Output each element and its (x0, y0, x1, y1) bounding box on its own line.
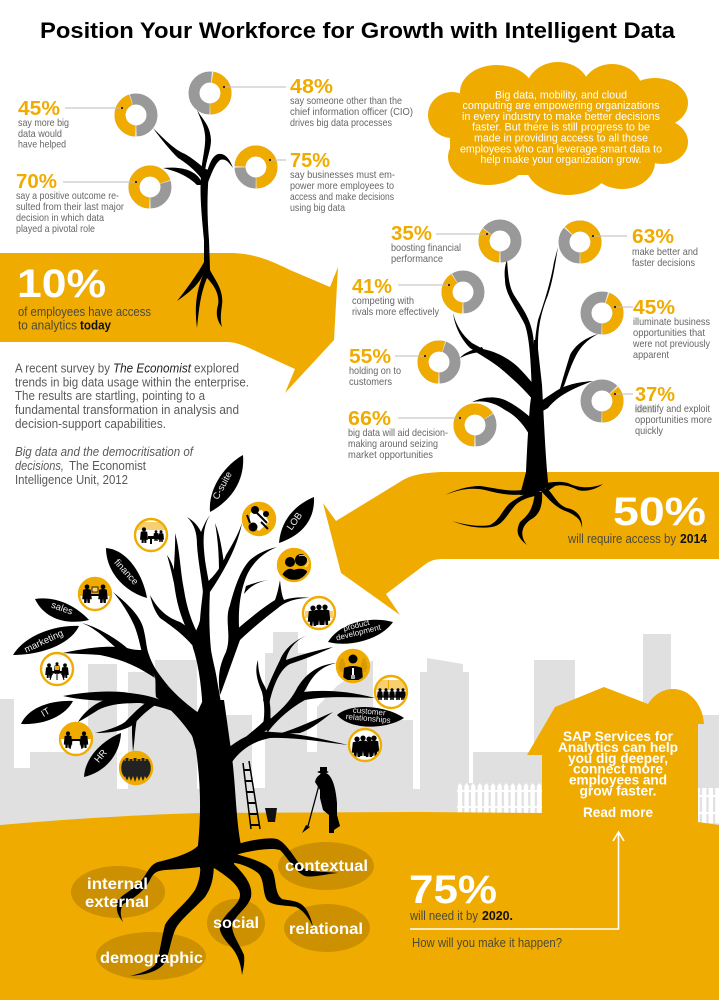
stat: 45% say more big data (18, 98, 123, 150)
10% callout: today (80, 318, 112, 332)
icon: three executives (303, 597, 335, 629)
stat: 41% competing with rivals: competing with (352, 296, 414, 307)
stat: 70% positive outcome: sulted from their last major (16, 202, 124, 213)
leaf: IT: IT (39, 706, 52, 720)
stat: 63% better decisions: make better and (632, 247, 698, 258)
root labels: demographic (100, 950, 203, 967)
stat: 41% competing with rivals (352, 276, 450, 318)
10% callout: 10% (17, 262, 106, 306)
stat: 75% empower more employees: using big data (290, 203, 345, 214)
medium tree (445, 247, 603, 545)
ground (0, 812, 719, 1000)
stat: 75% empower more employees: power more employees to (290, 181, 394, 192)
barn text: connect more (573, 760, 663, 776)
donut 45% opportunities (582, 293, 622, 333)
leaf: C-suite (210, 455, 243, 512)
cloud text: made in providing access to all those (474, 132, 648, 144)
stat: 37% identify and exploit: opportunities more (635, 415, 712, 426)
survey paragraph: explored (194, 362, 239, 376)
stat: 66% decision-making: making around seizing (348, 439, 438, 450)
stat: 45% illuminate opportunities: 45% (633, 297, 675, 319)
stat: 48% someone other than CIO (223, 76, 413, 129)
icon: call centre (278, 549, 310, 581)
skyline (0, 632, 719, 830)
barn text (558, 728, 678, 798)
icon: presenter at table (135, 519, 167, 551)
citation: Big data and the democritisation of (15, 445, 194, 459)
cloud text: help make your organization grow. (480, 154, 642, 166)
stat: 55% holding on to customers: 55% (349, 346, 391, 368)
root labels: social (213, 915, 259, 932)
leaf: LOB (279, 497, 314, 543)
75% callout: 75% (409, 868, 497, 912)
leaf: customer relationships: customer (352, 706, 386, 717)
title: Position Your Workforce for Growth with Intelligent Data (40, 18, 675, 43)
survey paragraph: The results are startling, pointing to a (15, 389, 205, 403)
survey paragraph: fundamental transformation in analysis and (15, 403, 239, 417)
leaf: C-suite: C-suite (211, 470, 235, 502)
cloud text: Big data, mobility, and cloud (495, 90, 627, 102)
10% callout (17, 262, 151, 332)
50% callout: 50% (613, 490, 706, 534)
icon: team from above (243, 503, 275, 535)
stat: 66% decision-making: 66% (348, 408, 391, 430)
stat: 45% say more big data: data would (18, 129, 62, 140)
survey paragraph (15, 362, 249, 431)
leaf: HR (84, 733, 121, 777)
small tree (153, 110, 233, 328)
cloud text: faster. But there is still progress to be (472, 122, 650, 134)
arrow: to read more (410, 832, 624, 929)
donut 75% (240, 151, 272, 183)
stat: 45% say more big data: say more big (18, 118, 69, 129)
stat: 48% someone other than CIO: say someone other than the (290, 96, 402, 107)
stat: 41% competing with rivals: rivals more effectively (352, 307, 440, 318)
stat: 70% positive outcome (16, 171, 137, 235)
closing question: How will you make it happen? (412, 935, 562, 950)
stat: 75% empower more employees: say businesses must em- (290, 170, 395, 181)
stat: 63% better decisions (592, 226, 698, 269)
icon: suited manager (337, 650, 369, 682)
citation: The Economist (69, 459, 146, 473)
cloud text: in every industry to make better decisions (462, 111, 660, 123)
stat: 55% holding on to customers: customers (349, 377, 392, 388)
icon: two at table (60, 723, 92, 755)
stat: 45% illuminate opportunities: illuminate business (633, 317, 710, 328)
stat: 63% better decisions: faster decisions (632, 258, 695, 269)
barn text: grow faster. (580, 782, 656, 798)
icon: standing team (349, 729, 381, 761)
stat: 45% illuminate opportunities: apparent (633, 350, 669, 361)
stat: 48% someone other than CIO: chief information officer (CIO) (290, 107, 413, 118)
barn (527, 687, 704, 824)
donut 63% (557, 219, 603, 265)
donut 41% (447, 276, 479, 308)
citation (15, 445, 194, 487)
root labels: relational (289, 921, 363, 938)
stat: 55% holding on to customers (349, 346, 426, 388)
stat: 37% identify and exploit: 37% (635, 384, 675, 406)
barn text: you dig deeper, (568, 750, 668, 766)
75% callout: will need it by (409, 908, 478, 923)
leaf: marketing (13, 626, 79, 656)
leaf: HR: HR (92, 748, 110, 765)
arrow: 10% band (0, 253, 338, 393)
donut 66% (459, 409, 491, 441)
75% callout (409, 868, 513, 923)
stat: 35% boosting financial performance: boosting financial (391, 243, 461, 254)
stat: 55% holding on to customers: holding on to (349, 366, 401, 377)
10% callout: of employees have access (18, 304, 151, 319)
stat: 45% illuminate opportunities (614, 297, 711, 361)
stat: 75% empower more employees: 75% (290, 150, 330, 172)
donut 35% (484, 225, 516, 257)
icon: crowd (120, 752, 152, 784)
stat: 66% decision-making: market opportunities (348, 450, 433, 461)
survey paragraph: The Economist (113, 362, 191, 376)
icon: meeting table (41, 653, 73, 685)
cloud text (460, 90, 662, 166)
survey paragraph: trends in big data usage within the enterprise. (15, 376, 249, 390)
50% callout: 2014 (680, 531, 708, 546)
bucket (265, 808, 277, 822)
cloud (428, 62, 688, 195)
stat: 45% illuminate opportunities: opportunities that (633, 328, 705, 339)
survey paragraph: decision-support capabilities. (15, 417, 166, 431)
stat: 35% boosting financial performance (391, 223, 488, 265)
leaf: finance (106, 548, 147, 598)
leaf: product development (328, 618, 393, 644)
leaf: LOB: LOB (285, 511, 305, 533)
stat: 75% empower more employees (269, 150, 395, 214)
survey paragraph: A recent survey by (15, 362, 111, 376)
stat: 41% competing with rivals: 41% (352, 276, 392, 298)
50% callout (567, 490, 708, 546)
icon: group row (375, 676, 407, 708)
stat: 70% positive outcome: decision in which data (16, 213, 104, 224)
stat: 48% someone other than CIO: 48% (290, 76, 333, 98)
donut 48% (192, 75, 228, 111)
stat: 37% identify and exploit: identify and exploit (635, 404, 710, 415)
donut 70% (134, 171, 166, 203)
stat: 63% better decisions: 63% (632, 226, 674, 248)
gardener (302, 767, 340, 833)
root labels (85, 858, 368, 967)
leaf: finance: finance (112, 557, 140, 587)
icon: two at desk (79, 578, 111, 612)
cloud text: computing are empowering organizations (462, 100, 660, 112)
ladder (243, 761, 260, 829)
leaf: marketing: marketing (23, 628, 65, 656)
10% callout: to analytics (18, 318, 77, 332)
barn text: SAP Services for (563, 728, 674, 744)
donut 55% (423, 346, 455, 378)
50% callout: will require access by (567, 531, 676, 546)
barn text: employees and (569, 772, 667, 788)
donut 45% more big data (120, 99, 152, 131)
stat: 37% identify and exploit (614, 384, 712, 437)
leaf: product development: development (335, 622, 382, 642)
root ellipses (71, 842, 374, 980)
read more link: Read more (583, 804, 653, 820)
stat: 75% empower more employees: access and make decisions (290, 192, 394, 203)
leaf: sales (35, 598, 89, 622)
leaf: product development: product (342, 618, 371, 633)
cloud text: employees who can leverage smart data to (460, 144, 662, 156)
stat: 37% identify and exploit: quickly (635, 426, 664, 437)
stat: 45% say more big data: have helped (18, 140, 66, 150)
stat: 66% decision-making (348, 408, 461, 461)
root labels: internal (87, 876, 148, 893)
barn text: Analytics can help (558, 739, 678, 755)
large tree (63, 515, 375, 976)
stat: 70% positive outcome: played a pivotal role (16, 224, 95, 235)
fence left (457, 783, 542, 814)
75% callout: 2020. (482, 908, 513, 923)
stat: 70% positive outcome: say a positive outcome re- (16, 191, 119, 202)
stat: 66% decision-making: big data will aid decision- (348, 428, 448, 439)
citation: Intelligence Unit, 2012 (15, 473, 128, 487)
leaf: IT (21, 701, 73, 724)
trunk (190, 700, 241, 869)
leaf: customer relationships: relationships (345, 712, 391, 725)
citation: decisions, (15, 459, 64, 473)
root labels: contextual (285, 858, 368, 875)
arrow: 50% band (323, 472, 719, 615)
stat: 35% boosting financial performance: performance (391, 254, 443, 265)
leaf: customer relationships (337, 706, 404, 727)
fence right (698, 788, 719, 824)
leaf: sales: sales (50, 600, 74, 618)
stat: 48% someone other than CIO: drives big data processes (290, 118, 392, 129)
root labels: external (85, 894, 149, 911)
donut 37% (579, 378, 625, 424)
stat: 35% boosting financial performance: 35% (391, 223, 432, 245)
stat: 70% positive outcome: 70% (16, 171, 57, 193)
stat: 45% say more big data: 45% (18, 98, 60, 120)
